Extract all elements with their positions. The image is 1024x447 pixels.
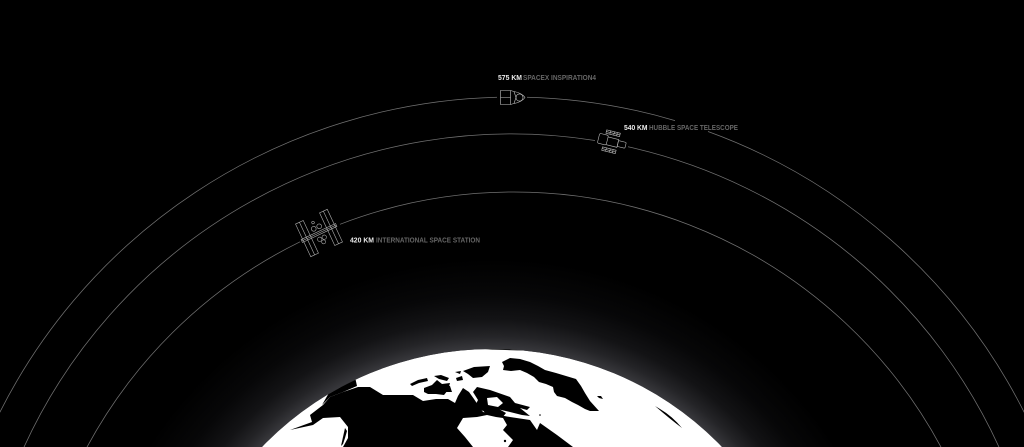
label: 575 km SpaceX Inspiration4: SPACEX INSPIRATION4: [523, 75, 596, 82]
label: 575 km SpaceX Inspiration4: [498, 75, 596, 80]
label: 420 km International Space Station: 420 KM: [350, 238, 374, 244]
small island east of greenland: [597, 396, 603, 399]
eastern limb sliver: [655, 406, 682, 428]
orbit: SpaceX Inspiration4, 575 km: [0, 97, 1024, 433]
icon: SpaceX capsule: [500, 90, 525, 104]
icon: Hubble Space Telescope: [597, 130, 626, 154]
greenland: [502, 358, 599, 411]
west coast detail: [341, 428, 347, 446]
inland white region: [457, 415, 513, 447]
atmosphere glow: [192, 295, 792, 447]
inland specks: [504, 414, 541, 442]
north america landmass: [290, 387, 573, 447]
orbit: International Space Station, 420 km: [80, 192, 948, 447]
earth globe: [262, 349, 722, 447]
label: 540 km Hubble Space Telescope: 540 KM: [624, 125, 648, 132]
label: 540 km Hubble Space Telescope: [624, 125, 738, 130]
label: 420 km International Space Station: INTERNATIONAL SPACE STATION: [376, 238, 480, 244]
northern ring of land: [473, 387, 530, 416]
label: 575 km SpaceX Inspiration4: 575 KM: [498, 75, 522, 82]
label: 420 km International Space Station: [350, 238, 480, 242]
land bridge below ring: [483, 408, 506, 416]
western limb shadow: [322, 377, 357, 405]
arctic islands: [410, 378, 428, 386]
northern limb shadow: [486, 349, 522, 350]
icon: International Space Station: [294, 209, 344, 257]
label: 540 km Hubble Space Telescope: HUBBLE SPACE TELESCOPE: [649, 125, 738, 132]
orbit: Hubble Space Telescope, 540 km: [18, 134, 1005, 447]
